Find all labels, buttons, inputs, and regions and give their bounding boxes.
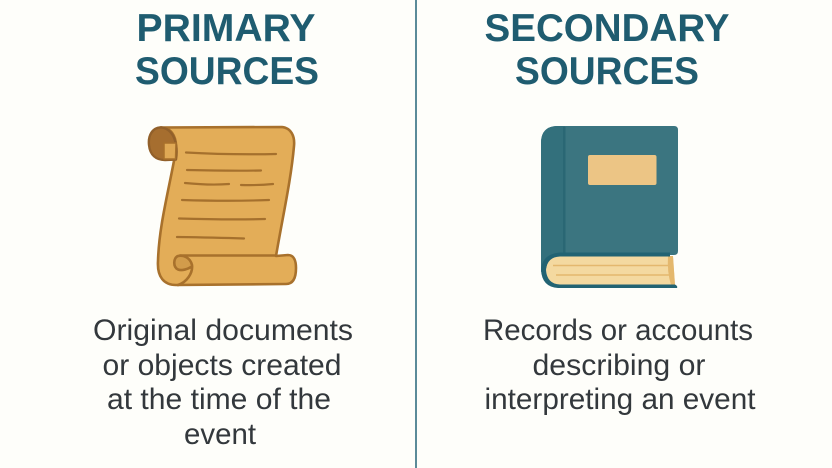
icon: parchment scroll [149, 127, 296, 285]
description: primary sources [93, 314, 353, 451]
description: secondary sources [483, 314, 756, 416]
scroll text lines [177, 152, 276, 238]
page edges [668, 256, 675, 285]
heading: secondary sources: SECONDARY [484, 7, 730, 50]
panel: primary sources [93, 7, 353, 451]
scroll sheet [158, 127, 296, 285]
book label [588, 155, 656, 185]
icon: closed book [541, 126, 678, 288]
heading: primary sources: PRIMARY [136, 7, 316, 50]
description: primary sources: event [184, 418, 256, 451]
book back cover edge [541, 252, 677, 288]
book pages [546, 256, 675, 285]
panel: secondary sources [483, 7, 756, 416]
book cover [541, 126, 678, 272]
heading: primary sources: SOURCES [135, 50, 319, 93]
description: primary sources: at the time of the [107, 383, 331, 416]
description: primary sources: Original documents [93, 314, 353, 347]
description: secondary sources: interpreting an event [484, 383, 756, 416]
scroll top curl [149, 127, 177, 160]
scroll bottom curl [174, 256, 276, 285]
center divider [415, 0, 417, 468]
heading: primary sources [135, 7, 319, 93]
description: primary sources: or objects created [102, 349, 342, 382]
heading: secondary sources [484, 7, 730, 93]
heading: secondary sources: SOURCES [515, 50, 699, 93]
description: secondary sources: Records or accounts [483, 314, 753, 347]
scroll top curl inner [164, 143, 176, 159]
book spine [541, 126, 565, 270]
description: secondary sources: describing or [532, 349, 706, 382]
